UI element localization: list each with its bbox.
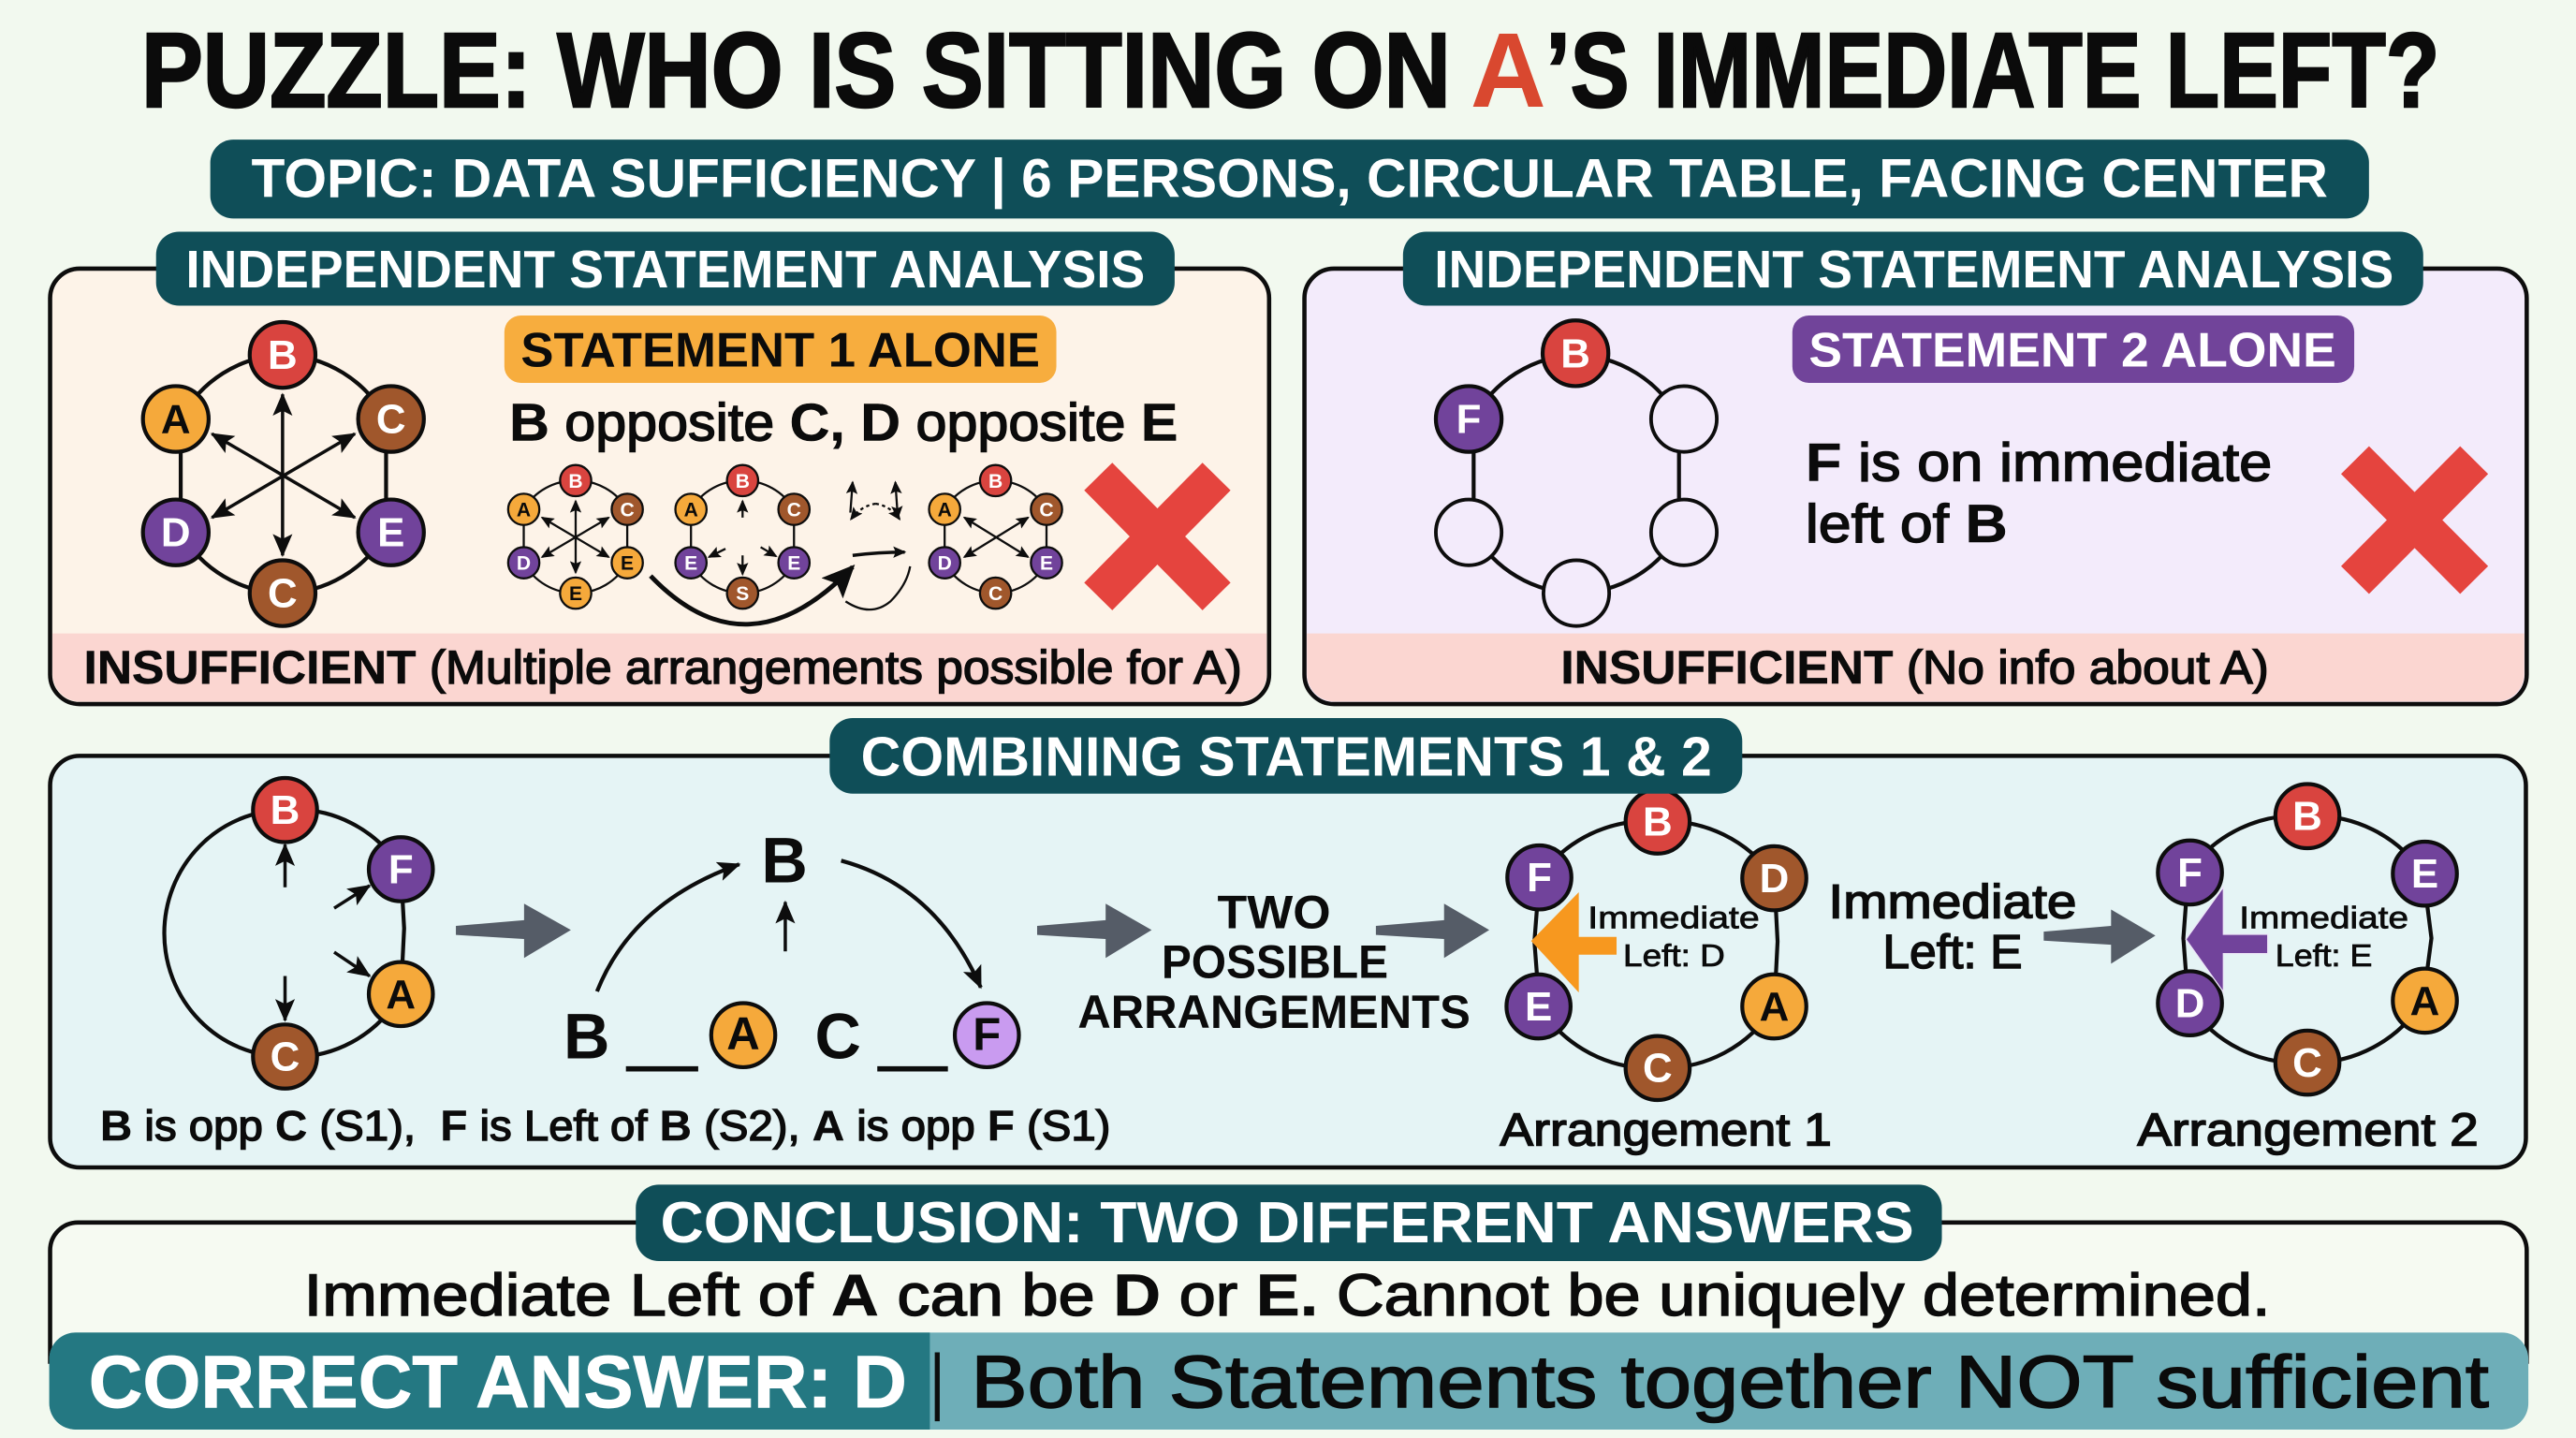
note: immediate left D: Immediate — [1588, 902, 1760, 936]
diagram: linear placement: B — [761, 824, 808, 896]
diagram: arrangement 2: B — [2292, 794, 2322, 840]
mini diagram: arrangement two: E — [787, 553, 800, 575]
mini diagram: arrangement three: C — [1039, 500, 1054, 521]
diagram: opposite pairs circle: C — [376, 396, 406, 442]
diagram: arrangement 2: A — [2410, 978, 2439, 1024]
diagram: arrangement 1: A — [1760, 984, 1789, 1030]
diagram: linear placement: F — [973, 1010, 1001, 1061]
mini diagram: arrangement one: A — [517, 500, 531, 521]
diagram: combined circle: A — [386, 972, 416, 1018]
title: PUZZLE: WHO IS SITTING ON — [141, 11, 1451, 129]
mini diagram: arrangement three: A — [938, 500, 952, 521]
divider bar — [936, 1352, 939, 1421]
diagram: F left of B circle: F — [1456, 396, 1481, 442]
diagram: arrangement 1: E — [1525, 984, 1552, 1030]
diagram: arrangement 2: F — [2177, 850, 2203, 896]
title: A — [1471, 11, 1546, 129]
text: two possible arrangements — [1077, 887, 1471, 1038]
diagram: opposite pairs circle — [143, 322, 424, 626]
arrow: immediate left purple — [2187, 889, 2267, 990]
diagram: F left of B circle — [1436, 320, 1717, 626]
caption: arrangement 2: Arrangement 2 — [2137, 1105, 2479, 1155]
diagram: arrangement 1: F — [1527, 855, 1552, 901]
curved arrows between mini diagrams — [651, 482, 910, 624]
heading: independent statement analysis: INDEPENDENT STATEMENT ANALYSIS — [185, 240, 1145, 299]
verdict: insufficient: INSUFFICIENT (No info about A) — [1560, 641, 2269, 694]
mini diagram: arrangement three: D — [938, 553, 952, 575]
text: immediate left E: Immediate — [1828, 874, 2076, 928]
panel: statement 1 alone — [51, 231, 1269, 704]
text: immediate left E — [1828, 874, 2076, 978]
conclusion text: Immediate Left of A can be D or E. Cannot be uniquely determined. — [304, 1263, 2271, 1328]
mini diagram: arrangement two: C — [787, 500, 801, 521]
mini diagram: arrangement two: E — [684, 553, 697, 575]
diagram: arrangement 1 — [1506, 789, 1807, 1100]
mini diagram: arrangement one: D — [517, 553, 531, 575]
mini diagram: arrangement one: E — [621, 553, 634, 575]
label: statement 1 alone: STATEMENT 1 ALONE — [520, 322, 1040, 376]
panel: conclusion — [50, 1184, 2528, 1430]
mini diagram: arrangement one — [508, 465, 643, 609]
diagram: linear placement: C — [815, 1000, 861, 1072]
diagram: arrangement 2: C — [2292, 1040, 2322, 1086]
diagram: arrangement 2: E — [2411, 851, 2438, 897]
diagram: opposite pairs circle: A — [161, 396, 191, 442]
arrow: immediate left orange — [1531, 892, 1617, 992]
statement 2 text — [1806, 433, 2272, 554]
heading: combining statements: COMBINING STATEMENTS 1 & 2 — [861, 725, 1712, 787]
note: immediate left E: Immediate — [2239, 902, 2408, 936]
mini diagram: arrangement three: B — [988, 471, 1003, 492]
panel: statement 2 alone — [1305, 231, 2526, 704]
diagram: combined circle: C — [271, 1034, 300, 1079]
diagram: opposite pairs circle: D — [161, 510, 191, 556]
label: statement 2 alone: STATEMENT 2 ALONE — [1808, 322, 2336, 376]
icon: red cross — [2355, 460, 2474, 580]
mini diagram: arrangement three — [929, 465, 1062, 609]
diagram: linear placement: A — [726, 1009, 760, 1060]
panel: combining statements — [51, 718, 2525, 1167]
diagram: arrangement 2 — [2158, 785, 2457, 1094]
diagram: opposite pairs circle: E — [377, 510, 404, 556]
diagram: linear placement: B — [564, 1000, 609, 1072]
diagram: combined circle: B — [271, 787, 300, 833]
diagram: opposite pairs circle: C — [268, 571, 298, 617]
mini diagram: arrangement one: E — [569, 583, 582, 605]
diagram: opposite pairs circle: B — [268, 332, 298, 378]
text: two possible arrangements: ARRANGEMENTS — [1077, 986, 1471, 1038]
text: immediate left E: Left: E — [1882, 925, 2023, 978]
verdict: insufficient: INSUFFICIENT (Multiple arrangements possible for A) — [84, 641, 1242, 694]
statement 2 text: F is on immediate — [1806, 433, 2272, 492]
caption: arrangement 1: Arrangement 1 — [1500, 1105, 1832, 1155]
topic banner: TOPIC: DATA SUFFICIENCY | 6 PERSONS, CIRCULAR TABLE, FACING CENTER — [252, 149, 2328, 211]
diagram: arrangement 1: D — [1760, 856, 1789, 902]
diagram: F left of B circle: B — [1560, 330, 1590, 376]
mini diagram: arrangement two — [676, 465, 810, 609]
note: immediate left E — [2239, 902, 2408, 974]
arrow — [456, 903, 571, 958]
note: immediate left D — [1588, 902, 1760, 974]
heading: conclusion: CONCLUSION: TWO DIFFERENT ANSWERS — [661, 1191, 1914, 1255]
text: two possible arrangements: TWO — [1218, 887, 1331, 939]
arrow — [1037, 903, 1151, 958]
mini diagram: arrangement two: S — [736, 583, 749, 605]
mini diagram: arrangement three: E — [1040, 553, 1053, 575]
mini diagram: arrangement one: C — [620, 500, 635, 521]
statement 2 text: left of B — [1806, 494, 2008, 554]
statement 1 text: B opposite C, D opposite E — [509, 392, 1178, 451]
diagram: arrangement 2: D — [2175, 980, 2204, 1026]
mini diagram: arrangement three: C — [988, 583, 1003, 605]
arrow — [1376, 903, 1489, 958]
reason text: Both Statements together NOT sufficient — [971, 1341, 2489, 1423]
diagram: arrangement 1: C — [1643, 1046, 1673, 1092]
text: two possible arrangements: POSSIBLE — [1162, 935, 1388, 988]
diagram: arrangement 1: B — [1643, 799, 1673, 844]
heading: independent statement analysis: INDEPENDENT STATEMENT ANALYSIS — [1434, 240, 2393, 299]
note: immediate left D: Left: D — [1623, 939, 1725, 974]
diagram: combined circle: F — [388, 846, 414, 892]
caption: combined facts: B is opp C (S1), F is Left of B (S2), A is opp F (S1) — [100, 1102, 1110, 1150]
icon: red cross — [1098, 477, 1217, 596]
mini diagram: arrangement two: A — [684, 500, 698, 521]
answer bar — [50, 1332, 2528, 1430]
arrow — [2043, 909, 2156, 963]
mini diagram: arrangement two: B — [736, 471, 750, 492]
title — [141, 11, 2439, 129]
mini diagram: arrangement one: B — [568, 471, 583, 492]
note: immediate left E: Left: E — [2276, 939, 2372, 974]
correct answer: CORRECT ANSWER: D — [89, 1341, 907, 1423]
diagram: combined circle — [165, 778, 432, 1089]
diagram: linear placement — [564, 824, 1019, 1072]
